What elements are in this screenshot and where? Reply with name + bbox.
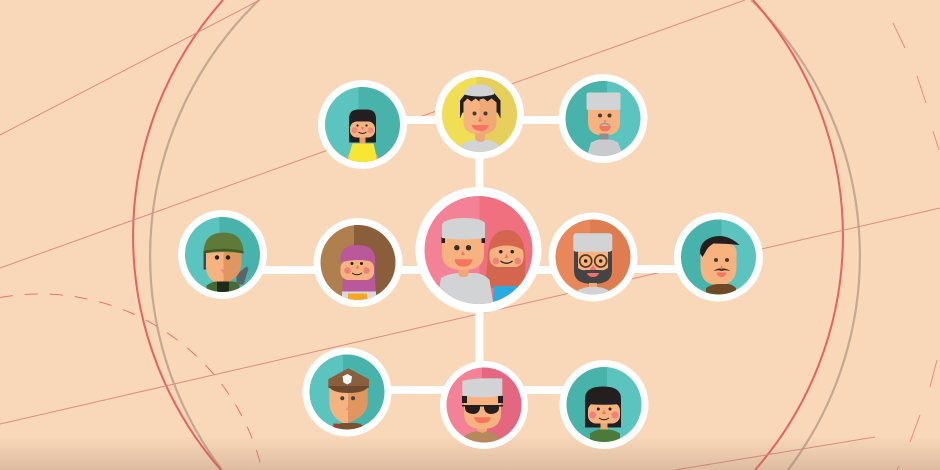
- man with white cap: [436, 218, 494, 305]
- avatar: woman with bob hair in camouflage: [560, 360, 648, 449]
- avatar: police officer with peaked cap: [302, 348, 392, 436]
- avatar: soldier with green helmet: [178, 210, 267, 299]
- avatar: man in sunglasses: [440, 361, 528, 449]
- avatar: boy with white cap: [435, 70, 524, 159]
- woman in terracotta hijab: [484, 230, 526, 305]
- avatar: central couple: [416, 187, 542, 313]
- avatar: elder with white cap and grey moustache: [558, 74, 648, 163]
- avatar: bearded man with glasses: [548, 212, 638, 302]
- bottom shadow band: [0, 436, 940, 470]
- network connectors: [222, 120, 718, 405]
- avatar: girl in yellow: [318, 80, 407, 169]
- avatar: woman in purple hijab: [314, 218, 402, 307]
- avatar: man with slick hair and moustache: [674, 212, 763, 302]
